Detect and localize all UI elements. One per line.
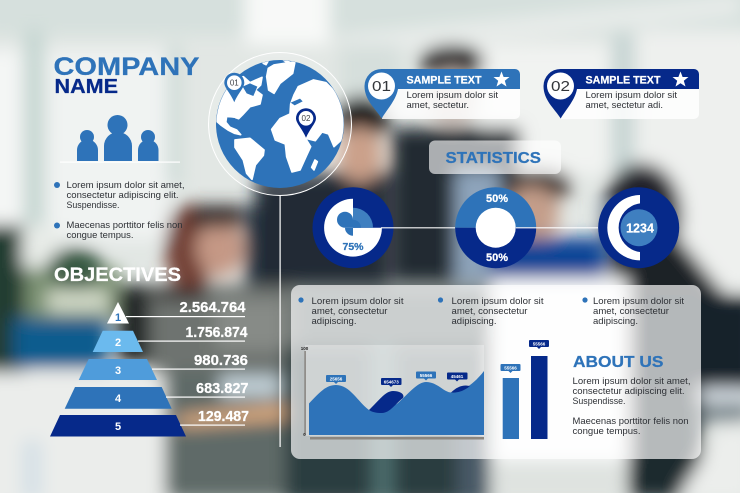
icon: star xyxy=(494,72,510,86)
text block: panel bullets: adipiscing. xyxy=(452,316,496,327)
text block: panel bullets xyxy=(298,296,684,327)
data labels: 45461 xyxy=(451,374,464,379)
pyramid level 3: 3 xyxy=(115,365,121,377)
donut: 1234 gauge xyxy=(598,187,679,268)
title: company name: COMPANY xyxy=(54,53,200,81)
pyramid level 5: 5 xyxy=(115,421,121,433)
text block: about us: Maecenas porttitor felis non xyxy=(572,416,688,427)
text block: panel bullets: Lorem ipsum dolor sit xyxy=(593,296,684,307)
text block: panel bullets: amet, consectetur xyxy=(452,306,528,317)
text block: about us: congue tempus. xyxy=(572,426,640,437)
text block: company bullets: Suspendisse. xyxy=(66,200,120,211)
donut: 50 percent split: 50% xyxy=(486,252,508,264)
text block: company bullets: congue tempus. xyxy=(66,230,134,241)
text block: panel bullets: Lorem ipsum dolor sit xyxy=(452,296,544,307)
callout: sample text 02: Lorem ipsum dolor sit xyxy=(586,90,677,101)
data labels: 55566 xyxy=(420,373,433,378)
area chart: 0 xyxy=(303,432,306,437)
continents xyxy=(213,60,347,179)
callout: sample text 02: SAMPLE TEXT xyxy=(586,74,661,86)
text block: about us: Lorem ipsum dolor sit amet, xyxy=(572,376,690,387)
text block: panel bullets: amet, consectetur xyxy=(312,306,388,317)
pyramid chart xyxy=(50,302,186,436)
objective values: 2.564.764 xyxy=(180,300,246,316)
woman right xyxy=(602,163,682,267)
heading: about us: ABOUT US xyxy=(573,354,664,371)
heading: objectives: OBJECTIVES xyxy=(54,265,181,286)
text block: company bullets: consectetur adipiscing elit. xyxy=(66,190,178,201)
text block: company bullets xyxy=(54,180,184,241)
callout: sample text 01 xyxy=(364,69,520,119)
text block: company bullets: Maecenas porttitor felis non xyxy=(66,220,182,231)
text block: about us: Suspendisse. xyxy=(572,396,626,407)
man two xyxy=(392,128,520,283)
text block: panel bullets: adipiscing. xyxy=(593,316,638,327)
donut: 1234 gauge: 1234 xyxy=(626,221,654,235)
callout: sample text 02 xyxy=(544,69,699,119)
pyramid level 4: 4 xyxy=(115,393,122,405)
donut: 50 percent split: 50% xyxy=(486,193,508,205)
pin 01 xyxy=(224,73,244,102)
table left xyxy=(0,372,170,493)
data labels: 25656 xyxy=(330,376,343,382)
data labels: 654673 xyxy=(384,380,399,384)
under panel tones xyxy=(296,288,491,348)
icon: three people xyxy=(60,115,180,163)
bar chart xyxy=(500,340,549,439)
panel: about us and chart xyxy=(291,285,701,459)
callout: sample text 01: amet, sectetur. xyxy=(406,100,469,111)
objective values: 129.487 xyxy=(198,409,249,425)
plant and pot xyxy=(0,225,25,375)
text block: panel bullets: adipiscing. xyxy=(312,316,356,327)
callout: sample text 01: 01 xyxy=(372,79,391,95)
icon: star xyxy=(672,72,688,86)
man three xyxy=(508,168,572,202)
connector line: globe to bottom xyxy=(280,195,281,447)
data labels xyxy=(326,372,468,387)
pyramid level 1: 1 xyxy=(115,312,121,324)
bar chart: 55566 xyxy=(533,342,546,346)
objective values: 683.827 xyxy=(196,381,248,397)
connector line: statistics xyxy=(381,227,598,228)
bar chart: 55566 xyxy=(504,366,517,370)
upper wall and ceiling xyxy=(0,0,740,35)
heading: statistics xyxy=(429,140,561,174)
text block: panel bullets: amet, consectetur xyxy=(593,306,669,317)
title: company name xyxy=(54,53,200,98)
donut: 50 percent split xyxy=(455,187,536,268)
callout: sample text 01: SAMPLE TEXT xyxy=(406,74,482,86)
donut: 75 percent: 75% xyxy=(342,241,364,253)
man one xyxy=(255,172,390,286)
text block: about us xyxy=(572,376,690,437)
pin 01: 01 xyxy=(230,79,239,88)
objective values xyxy=(126,300,249,426)
woman and laptop xyxy=(245,205,285,285)
pin 02 xyxy=(296,108,316,138)
objective values: 980.736 xyxy=(194,353,248,369)
callout: sample text 02: amet, sectetur adi. xyxy=(586,100,663,111)
text block: panel bullets: Lorem ipsum dolor sit xyxy=(312,296,404,307)
text block: company bullets: Lorem ipsum dolor sit amet, xyxy=(66,180,184,191)
area chart xyxy=(301,345,484,440)
objective values: 1.756.874 xyxy=(186,325,248,341)
callout: sample text 01: Lorem ipsum dolor sit xyxy=(406,90,498,101)
globe with pins xyxy=(208,52,352,196)
text block: about us: consectetur adipiscing elit. xyxy=(572,386,684,397)
callout: sample text 02: 02 xyxy=(551,79,570,95)
pyramid level 2: 2 xyxy=(115,337,121,349)
area chart: 100 xyxy=(301,346,309,351)
pin 02: 02 xyxy=(302,114,311,123)
lower desk xyxy=(165,370,295,493)
donut: 75 percent xyxy=(312,187,394,268)
title: company name: NAME xyxy=(54,76,118,98)
heading: statistics: STATISTICS xyxy=(446,150,541,167)
